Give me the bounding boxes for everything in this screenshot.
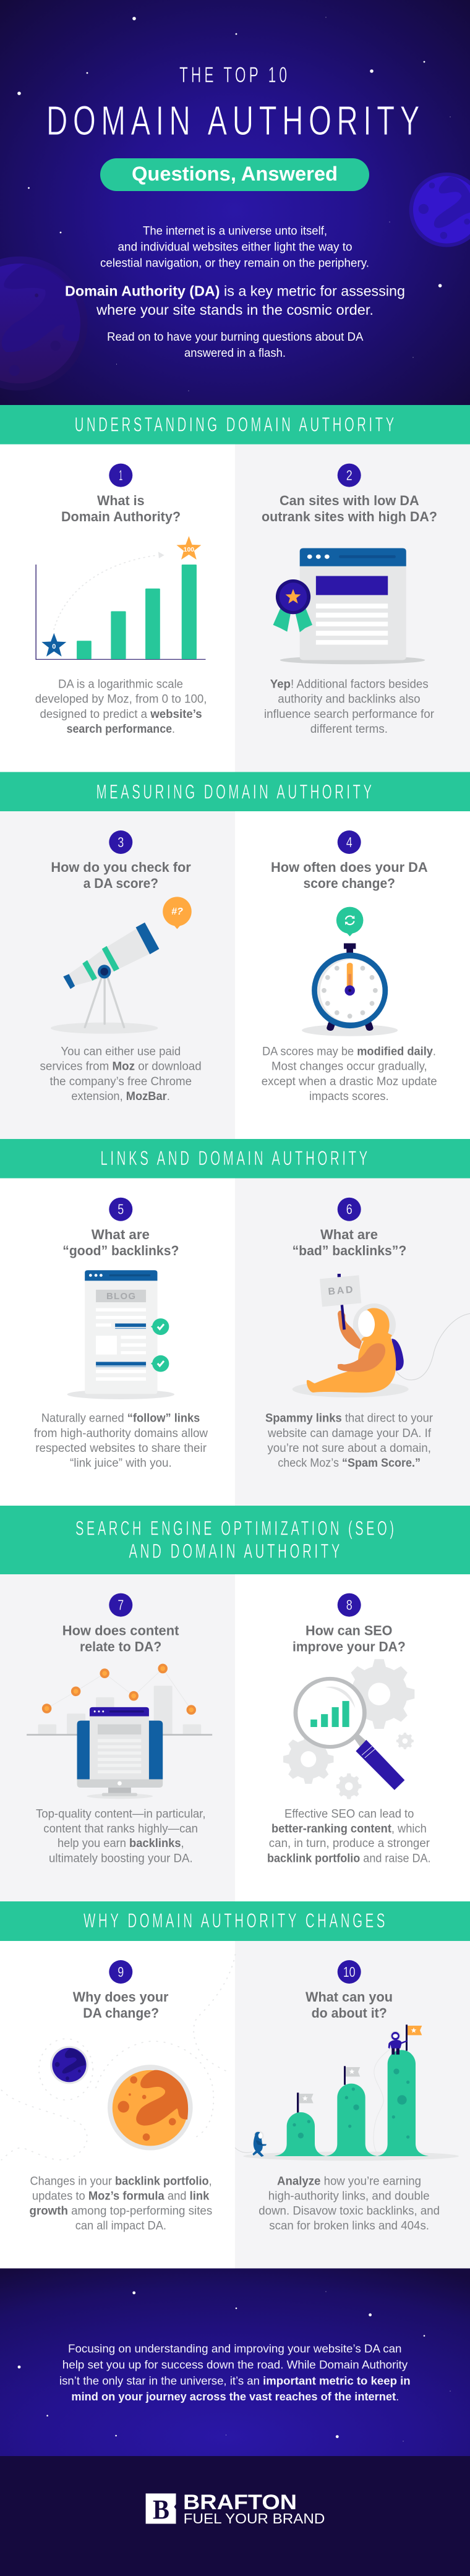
badge 7: 7	[118, 1597, 124, 1613]
heading: good backlinks	[62, 1227, 179, 1258]
heading: what can you do: do about it?	[312, 2005, 387, 2021]
stars: closing	[18, 2292, 451, 2441]
panel: measuring domain authority section	[0, 772, 470, 1139]
heading: why does your DA change: Why does your	[73, 1989, 169, 2005]
text: answer 3: extension, MozBar.	[71, 1090, 170, 1103]
text: closing paragraph: Focusing on understanding and improving your website’s DA can	[68, 2342, 402, 2355]
icon: blog page with checks	[67, 1270, 174, 1399]
heading: bad backlinks: What are	[320, 1227, 378, 1242]
panel: why domain authority changes section	[0, 1901, 470, 2269]
text block: intro: The internet is a universe unto itself,	[143, 225, 327, 237]
question 2	[262, 464, 437, 736]
chart: DA scale bars	[36, 536, 206, 659]
icon: right planet	[409, 173, 470, 247]
heading band: links	[0, 1139, 470, 1179]
icon: monitor with line chart	[27, 1664, 212, 1799]
text: answer 8: better-ranking content, which	[271, 1822, 427, 1835]
heading: content	[62, 1623, 179, 1655]
badge 3	[109, 830, 132, 854]
question 1	[35, 464, 207, 736]
text: answer 4: except when a drastic Moz update	[262, 1075, 437, 1088]
badge 10	[338, 1960, 361, 1984]
text: answer 1: developed by Moz, from 0 to 100,	[35, 693, 207, 706]
panel: hero header	[0, 0, 470, 405]
text: answer 3: the company’s free Chrome	[49, 1075, 192, 1088]
icon: web page with award ribbon	[273, 548, 425, 664]
text block: read on: Read on to have your burning questions about DA	[107, 331, 364, 344]
badge 5: 5	[118, 1201, 124, 1218]
heading: bad backlinks: “bad” backlinks”?	[293, 1243, 406, 1258]
chart: DA scale bars: 100	[184, 546, 194, 553]
text: closing paragraph: isn’t the only star in the universe, it’s an important metric to keep in	[59, 2374, 411, 2387]
panel: closing statement	[0, 2268, 470, 2456]
heading: how often	[271, 859, 428, 891]
logo: brafton: BRAFTON	[183, 2491, 297, 2514]
text: answer 1	[35, 678, 207, 736]
text: answer 7: Top-quality content—in particular,	[36, 1808, 205, 1820]
badge 4: 4	[346, 834, 352, 850]
text: closing paragraph: mind on your journey across the vast reaches of the internet.	[71, 2390, 399, 2403]
text block: DA definition: where your site stands in the cosmic order.	[96, 302, 374, 318]
text: answer 6	[265, 1412, 434, 1470]
heading: SEO improve	[293, 1623, 406, 1655]
heading: what is domain authority: Domain Authority?	[61, 509, 181, 524]
logo: brafton: FUEL YOUR BRAND	[184, 2510, 325, 2527]
text: answer 2: authority and backlinks also	[278, 693, 421, 706]
badge 8: 8	[346, 1597, 352, 1613]
text block: DA definition	[65, 283, 405, 318]
heading band: measuring	[0, 772, 470, 811]
heading: why does your DA change	[73, 1989, 169, 2021]
text block: read on: answered in a flash.	[184, 347, 286, 360]
text: answer 3	[40, 1046, 202, 1103]
text: answer 1: DA is a logarithmic scale	[58, 678, 183, 691]
badge 8	[338, 1593, 361, 1617]
icon: telescope with score bubble	[51, 897, 192, 1034]
question 3	[40, 830, 202, 1103]
text: answer 9: growth among top-performing sites	[30, 2205, 212, 2218]
badge 2: 2	[346, 467, 352, 484]
question 8	[267, 1593, 431, 1865]
text: answer 7: ultimately boosting your DA.	[49, 1853, 193, 1865]
icon: telescope with score bubble: #?	[171, 906, 183, 917]
icon: planets with dotted orbits	[1, 1955, 235, 2160]
heading: what is domain authority: What is	[97, 493, 145, 508]
text: answer 7: content that ranks highly—can	[43, 1822, 198, 1835]
question 10	[235, 1960, 459, 2233]
text: answer 2: influence search performance for	[264, 708, 435, 721]
pill: questions, answered	[100, 158, 369, 191]
text: answer 5: “link juice” with you.	[70, 1457, 172, 1470]
text: answer 4: Most changes occur gradually,	[271, 1060, 427, 1073]
text: answer 7	[36, 1808, 205, 1865]
badge 2	[338, 464, 361, 487]
heading band: why changes	[0, 1901, 470, 1941]
text: answer 5: respected websites to share their	[35, 1442, 207, 1455]
text: answer 6: Spammy links that direct to your	[265, 1412, 434, 1425]
icon: stopwatch with refresh bubble	[302, 907, 398, 1036]
heading: good backlinks: “good” backlinks?	[62, 1243, 179, 1258]
text: answer 10: Analyze how you’re earning	[277, 2175, 421, 2188]
text block: intro: celestial navigation, or they remain on the periphery.	[100, 257, 369, 270]
text: answer 5: Naturally earned “follow” links	[41, 1412, 200, 1425]
pill: questions, answered: Questions, Answered	[132, 163, 338, 185]
logo: brafton	[146, 2491, 325, 2527]
heading: how do you check	[51, 859, 191, 891]
text: answer 1: search performance.	[67, 723, 175, 736]
text: answer 1: designed to predict a website’s	[40, 708, 202, 721]
text: answer 8: can, in turn, produce a stronger	[269, 1837, 430, 1850]
text: answer 9	[30, 2175, 212, 2233]
heading: how do you check: a DA score?	[83, 876, 158, 891]
text block: intro: and individual websites either light the way to	[118, 241, 352, 254]
heading: can sites outrank: Can sites with low DA	[280, 493, 419, 508]
question 7	[27, 1593, 212, 1865]
text: answer 3: You can either use paid	[61, 1046, 181, 1059]
text: closing paragraph: help set you up for success down the road. While Domain Authority	[62, 2358, 408, 2371]
heading: can sites outrank: outrank sites with high DA?	[262, 509, 437, 524]
heading: what is domain authority	[61, 493, 181, 524]
text: answer 2: different terms.	[310, 723, 388, 736]
heading: what can you do: What can you	[306, 1989, 393, 2005]
panel: links and domain authority section	[0, 1139, 470, 1506]
text: answer 10	[258, 2175, 440, 2233]
chart: DA scale bars: 0	[52, 643, 56, 650]
text: answer 7: help you earn backlinks,	[58, 1837, 184, 1850]
badge 6	[338, 1198, 361, 1221]
badge 6: 6	[346, 1201, 352, 1218]
icon: left planet	[0, 257, 88, 391]
icon: astronaut with bad sign: BAD	[328, 1285, 353, 1297]
badge 9: 9	[118, 1964, 124, 1980]
heading band: SEO: AND DOMAIN AUTHORITY	[129, 1540, 343, 1562]
icon: astronaut with bad sign	[293, 1274, 470, 1397]
heading: bad backlinks	[293, 1227, 406, 1258]
badge 5	[109, 1198, 132, 1221]
text block: intro	[100, 225, 369, 270]
heading band: SEO	[0, 1506, 470, 1574]
text: answer 9: updates to Moz’s formula and link	[32, 2190, 210, 2203]
heading: why does your DA change: DA change?	[83, 2005, 159, 2021]
question 9	[1, 1955, 235, 2233]
text: answer 10: high-authority links, and double	[268, 2190, 430, 2203]
heading: how often: How often does your DA	[271, 859, 428, 875]
badge 7	[109, 1593, 132, 1617]
stars	[17, 17, 450, 391]
text block: DA definition: Domain Authority (DA) is a key metric for assessing	[65, 283, 405, 299]
text block: read on	[107, 331, 364, 360]
icon: blog page with checks: BLOG	[106, 1291, 135, 1302]
text: closing paragraph	[59, 2342, 411, 2403]
text: answer 10: down. Disavow toxic backlinks, and	[258, 2205, 440, 2218]
text: answer 3: services from Moz or download	[40, 1060, 202, 1073]
badge 1: 1	[119, 467, 122, 484]
text: answer 8	[267, 1808, 431, 1865]
panel: SEO and domain authority section	[0, 1506, 470, 1901]
panel: understanding domain authority section	[0, 405, 470, 772]
heading: content: How does content	[62, 1623, 179, 1639]
text: answer 2: Yep! Additional factors besides	[270, 678, 429, 691]
text: answer 6: check Moz’s “Spam Score.”	[278, 1457, 421, 1470]
heading: can sites outrank	[262, 493, 437, 524]
heading: content: relate to DA?	[80, 1639, 161, 1655]
text: answer 6: website can damage your DA. If	[267, 1427, 432, 1440]
panel: footer with logo	[0, 2456, 470, 2576]
text: answer 4	[262, 1046, 437, 1103]
question 5	[34, 1198, 208, 1470]
title: the top 10: THE TOP 10	[179, 63, 290, 87]
badge 10: 10	[343, 1964, 356, 1980]
badge 9	[109, 1960, 132, 1984]
heading: what can you do	[306, 1989, 393, 2021]
text: answer 6: you’re not sure about a domain,	[267, 1442, 431, 1455]
logo: brafton: B	[153, 2494, 169, 2525]
question 6	[265, 1198, 470, 1470]
heading: SEO improve: improve your DA?	[293, 1639, 406, 1655]
heading: how often: score change?	[303, 876, 395, 891]
badge 1	[109, 464, 132, 487]
text: answer 10: scan for broken links and 404s.	[269, 2220, 429, 2233]
text: answer 4: DA scores may be modified daily.	[262, 1046, 436, 1059]
question 4	[262, 830, 437, 1103]
text: answer 8: backlink portfolio and raise DA.	[267, 1853, 431, 1865]
heading band: understanding	[0, 405, 470, 444]
text: answer 9: Changes in your backlink portfolio,	[30, 2175, 212, 2188]
icon: magnifier and gears	[283, 1659, 414, 1799]
heading: SEO improve: How can SEO	[306, 1623, 392, 1639]
text: answer 4: impacts scores.	[309, 1090, 389, 1103]
heading: good backlinks: What are	[92, 1227, 150, 1242]
text: answer 2	[264, 678, 435, 736]
icon: hills with flags and astronauts	[235, 2024, 459, 2160]
badge 4	[338, 830, 361, 854]
heading: how do you check: How do you check for	[51, 859, 191, 875]
text: answer 8: Effective SEO can lead to	[284, 1808, 414, 1820]
text: answer 5	[34, 1412, 208, 1470]
text: answer 5: from high-authority domains allow	[34, 1427, 208, 1440]
badge 3: 3	[118, 834, 124, 850]
text: answer 9: can all impact DA.	[75, 2220, 166, 2233]
